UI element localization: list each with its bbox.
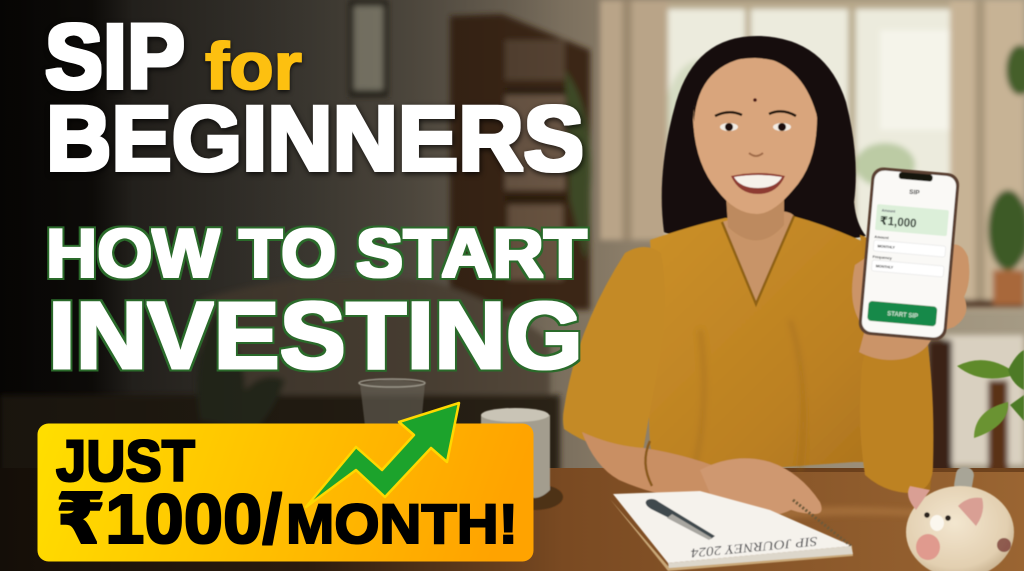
plant on shelf — [565, 70, 591, 260]
phone field: frequency: Frequency — [872, 255, 893, 261]
amount card — [875, 204, 949, 236]
sofa — [200, 278, 550, 400]
title: SIP: SIP — [45, 6, 185, 108]
hand on notebook — [700, 458, 822, 515]
banner text: JUST: JUST — [56, 429, 195, 494]
nose — [749, 153, 763, 156]
pen — [646, 499, 715, 539]
window plant — [988, 45, 1024, 305]
title: for: for — [205, 29, 302, 103]
eyebrows — [715, 112, 742, 116]
window — [660, 0, 960, 240]
bookshelf — [450, 14, 590, 310]
side furniture — [928, 300, 1024, 490]
mug and coaster — [481, 408, 563, 510]
phone field: frequency: MONTHLY — [876, 264, 894, 270]
icon: rising green arrow — [306, 403, 459, 507]
eyes — [720, 123, 738, 131]
start sip button — [867, 301, 938, 327]
arm holding phone — [860, 235, 933, 493]
phone title: SIP — [909, 189, 921, 197]
room plant — [197, 310, 285, 430]
hair front — [694, 42, 820, 122]
title: BEGINNERS: BEGINNERS — [46, 88, 584, 190]
forearm skin — [582, 432, 734, 506]
phone field: period: MONTHLY — [877, 244, 896, 250]
neck — [726, 195, 784, 241]
banner text: MONTH!: MONTH! — [286, 492, 518, 555]
piggy bank — [906, 466, 1014, 571]
subtitle: HOW TO START: HOW TO START — [46, 216, 587, 292]
hand behind phone — [852, 244, 969, 360]
start sip button: START SIP — [887, 311, 918, 320]
smile — [731, 173, 785, 194]
bindi — [753, 98, 757, 102]
bracelet — [645, 441, 652, 486]
banner text: ₹1000/: ₹1000/ — [56, 480, 282, 558]
glass of water — [359, 379, 425, 426]
notebook with pen — [610, 491, 853, 571]
arm left of viewer — [563, 247, 665, 451]
amount card: ₹1,000 — [879, 215, 917, 231]
neckline — [722, 211, 794, 304]
price banner — [38, 403, 534, 562]
torso — [649, 216, 932, 492]
curtains — [600, 0, 1024, 310]
phone — [858, 166, 960, 342]
phone field: period: Amount — [874, 235, 890, 240]
woman — [563, 36, 969, 515]
shirt folds — [640, 270, 803, 470]
hair back — [662, 36, 866, 239]
notebook handwriting: SIP JOURNEY 2024 — [690, 534, 818, 561]
phone field: period — [873, 235, 946, 257]
phone notch — [899, 172, 933, 182]
banner background — [38, 424, 534, 562]
subtitle: INVESTING: INVESTING — [48, 283, 583, 389]
table — [0, 468, 1024, 571]
plant leaves at right — [957, 350, 1024, 438]
phone field: frequency — [871, 255, 945, 277]
picture frame — [349, 0, 388, 97]
amount card: Amount — [882, 208, 896, 214]
face — [693, 58, 817, 214]
